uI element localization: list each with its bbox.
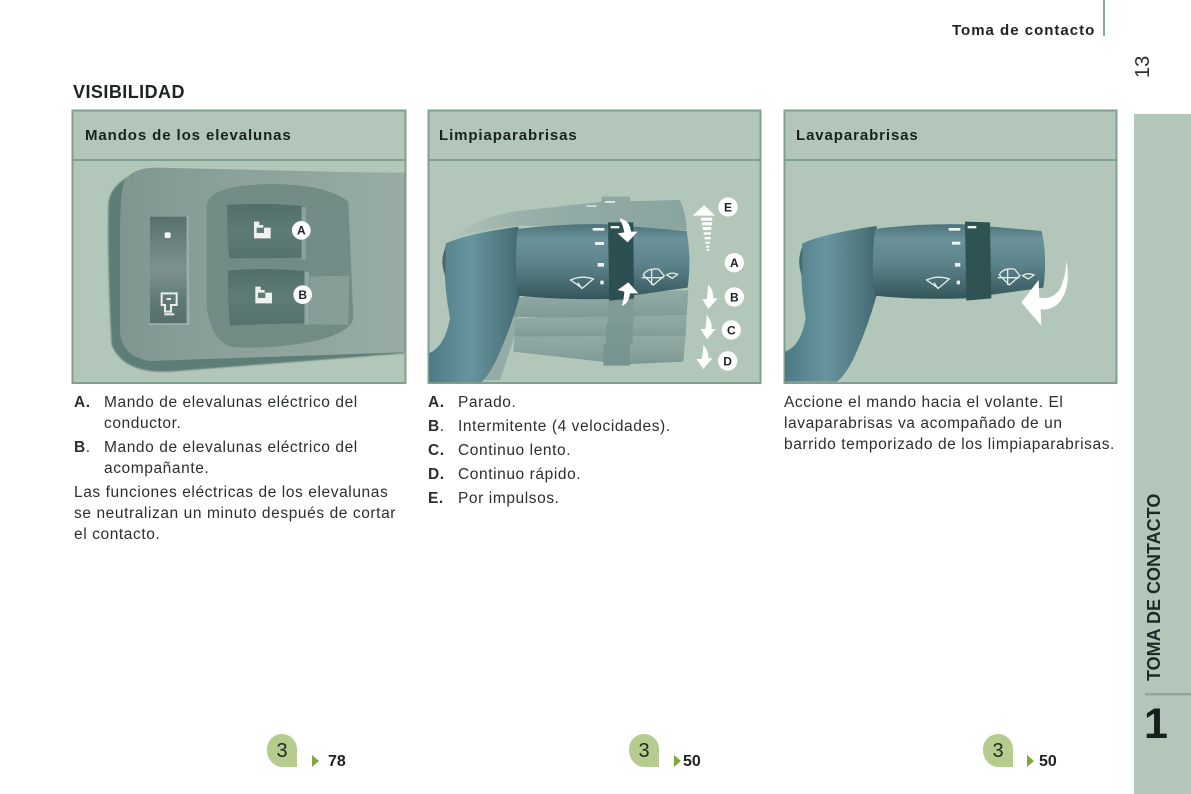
panel: Limpiaparabrisas [428,110,761,383]
reference: page 78 [267,734,346,770]
text block: limpiaparabrisas: B. [428,418,445,435]
text block: elevalunas: A. [74,394,90,411]
icon: rear wiper [998,269,1034,285]
section heading: VISIBILIDAD [73,82,185,102]
arrow: E up [693,205,715,251]
reference: page 78: 3 [276,740,288,762]
text block: elevalunas: se neutralizan un minuto después de cortar [74,505,396,522]
label E: E [724,200,732,214]
running header: Toma de contacto: Toma de contacto [952,22,1095,39]
text block: lavaparabrisas: lavaparabrisas va acompañado de un [784,415,1063,432]
label A: A [730,256,739,270]
panel heading: Mandos de los elevalunas [85,127,292,144]
label A [292,221,311,240]
chapter number: 1 [1144,700,1168,748]
stalk arm [429,227,520,382]
text block: elevalunas: acompañante. [104,460,209,477]
text block: limpiaparabrisas: D. [428,466,444,483]
text block: limpiaparabrisas: E. [428,490,444,507]
stalk barrel [516,224,689,299]
arrow: rotate down [618,218,638,242]
text block: limpiaparabrisas: Parado. [458,394,516,411]
text block: limpiaparabrisas: C. [428,442,444,459]
label A: A [297,224,306,238]
icon: wiper [927,277,949,289]
reference: page 50 (right): 3 [992,740,1004,762]
icon: indicator dot [165,232,171,238]
side tab: chapter [1134,114,1191,794]
label B: B [298,288,307,302]
icon: window switch A [254,222,271,238]
chapter title: TOMA DE CONTACTO [1144,494,1164,681]
panel heading: Limpiaparabrisas [439,127,578,144]
reference: page 50 (right) [983,734,1057,770]
label C: C [727,323,736,337]
text block: limpiaparabrisas: Continuo rápido. [458,466,581,483]
text block: lavaparabrisas: barrido temporizado de los limpiaparabrisas. [784,436,1115,453]
label B [293,285,312,304]
text block: elevalunas: Mando de elevalunas eléctrico del [104,439,358,456]
text block: elevalunas: Mando de elevalunas eléctrico del [104,394,358,411]
arrow: rotate up [618,282,638,306]
icon: window lock [162,293,177,314]
text block: elevalunas: B. [74,439,91,456]
reference: page 50 (right): 50 [1039,753,1057,770]
dark ring [965,222,991,301]
illustration: washer stalk [785,222,1068,382]
speed marks [593,226,619,284]
illustration: wiper stalk with positions [429,197,744,382]
reference: page 50 (centre) [629,734,701,770]
arrow: B down [702,284,718,309]
reference: page 50 (centre): 3 [638,740,650,762]
stalk barrel [873,224,1045,299]
text block: limpiaparabrisas: Continuo lento. [458,442,571,459]
reference: page 50 (centre): 50 [683,753,701,770]
ghost stalks down [513,290,688,321]
stalk arm [785,226,877,382]
ghost arm [480,302,520,380]
label D: D [723,354,732,368]
reference: page 78: 78 [328,753,346,770]
text block: elevalunas: conductor. [104,415,181,432]
label A [725,253,744,272]
text block: elevalunas [74,394,396,543]
text block: limpiaparabrisas: Por impulsos. [458,490,560,507]
speed marks [949,226,976,284]
icon: rear wiper [642,269,678,285]
label D [718,351,737,371]
label B: B [730,290,739,304]
text block: elevalunas: el contacto. [74,526,160,543]
arrow: D down [696,345,712,369]
ghost stalk up [447,200,687,240]
panel heading: Lavaparabrisas [796,127,919,144]
arrow: curved push [1021,261,1068,326]
label E [718,197,738,217]
text block: limpiaparabrisas [428,394,671,507]
panel: Mandos de los elevalunas [72,110,406,383]
illustration: window switch panel [108,168,404,372]
text block: lavaparabrisas [784,394,1115,453]
panel: Lavaparabrisas [784,110,1117,383]
text block: elevalunas: Las funciones eléctricas de los elevalunas [74,484,388,501]
icon: window switch B [255,287,272,303]
label C [722,320,741,340]
icon: wiper [571,277,593,289]
text block: limpiaparabrisas: A. [428,394,444,411]
text block: limpiaparabrisas: Intermitente (4 velocidades). [458,418,671,435]
page number: 13 [1132,56,1154,78]
dark ring [608,222,634,301]
label B [725,287,744,307]
text block: lavaparabrisas: Accione el mando hacia el volante. El [784,394,1063,411]
arrow: C down [700,315,716,339]
